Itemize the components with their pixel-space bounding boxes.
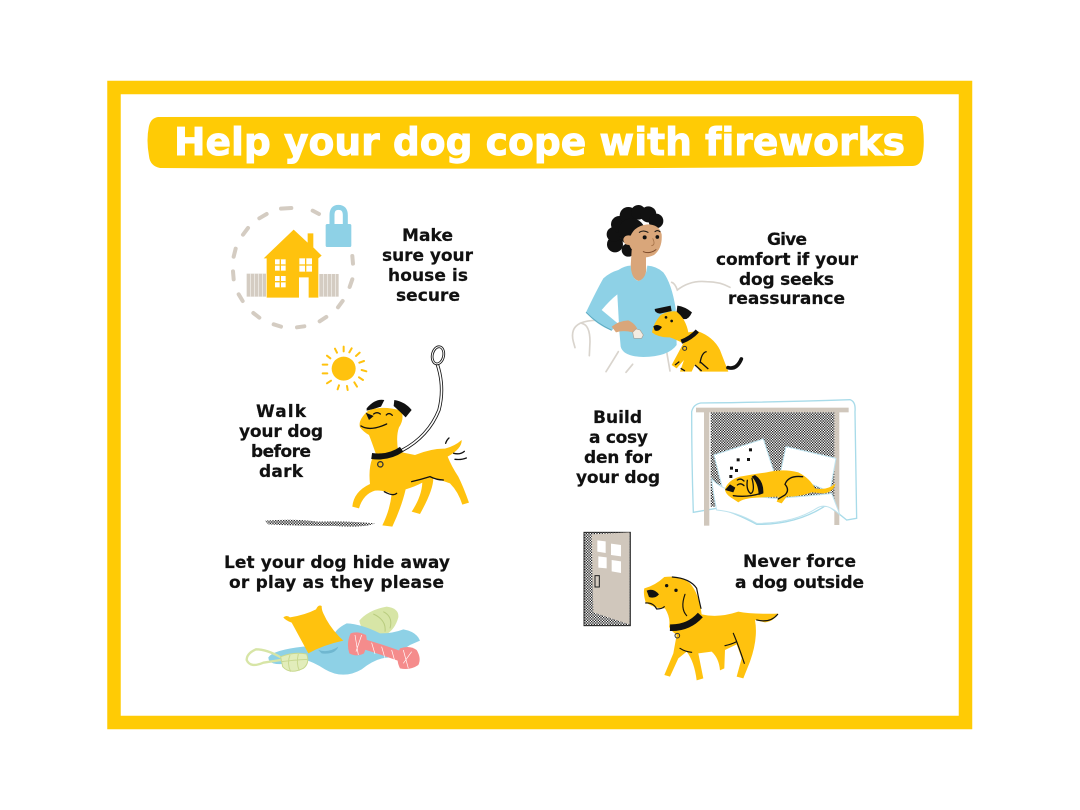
dashed circle bbox=[233, 208, 353, 327]
ground shadow bbox=[265, 520, 375, 527]
text: never force: a dog outside bbox=[735, 573, 864, 593]
illustration: person comforting dog on sofa bbox=[572, 205, 741, 372]
sweater bbox=[586, 266, 677, 357]
text: walk your dog: dark bbox=[259, 462, 304, 482]
title banner bbox=[148, 116, 924, 169]
text: walk your dog bbox=[239, 402, 323, 482]
text: make sure: secure bbox=[396, 286, 460, 306]
text: make sure bbox=[382, 226, 474, 306]
title: Help your dog cope with fireworks bbox=[174, 120, 905, 164]
green shell toy bbox=[359, 607, 398, 635]
panel: never force outside bbox=[584, 532, 864, 680]
table frame bbox=[696, 408, 849, 526]
house bbox=[264, 230, 322, 298]
text: make sure: sure your bbox=[382, 246, 474, 266]
text: give comfort: dog seeks bbox=[739, 270, 834, 290]
illustration: toys and blanket bbox=[247, 605, 420, 675]
blanket bbox=[712, 478, 840, 523]
text: let your dog hide bbox=[224, 553, 450, 593]
illustration: sun, dog and lead bbox=[265, 346, 469, 527]
text: give comfort: comfort if your bbox=[716, 250, 859, 270]
text: walk your dog: before bbox=[251, 442, 311, 462]
icon: house in dashed circle with padlock bbox=[233, 207, 353, 327]
text: walk your dog: your dog bbox=[239, 422, 323, 442]
green rope toy bbox=[247, 649, 281, 665]
text: build a cosy den bbox=[576, 408, 660, 488]
door bbox=[584, 532, 630, 626]
yellow pillow bbox=[283, 605, 343, 653]
text: let your dog hide: or play as they please bbox=[229, 573, 444, 593]
text: build a cosy den: den for bbox=[584, 448, 653, 468]
panel: secure house bbox=[233, 207, 474, 327]
dark background bbox=[711, 412, 837, 507]
text: make sure: Make bbox=[402, 226, 453, 246]
text: walk your dog: Walk bbox=[256, 402, 307, 422]
dog bbox=[725, 470, 836, 503]
head bbox=[623, 224, 662, 257]
illustration: dog sleeping in den bbox=[692, 400, 857, 526]
padlock bbox=[332, 207, 345, 226]
text: never force: Never force bbox=[743, 552, 856, 572]
pink rope toy bbox=[348, 632, 420, 669]
text: build a cosy den: Build bbox=[593, 408, 642, 428]
fence bbox=[247, 274, 339, 297]
dog bbox=[652, 311, 728, 372]
blue blanket bbox=[268, 623, 420, 675]
sofa outline bbox=[572, 281, 730, 372]
panel: hide away or play bbox=[224, 553, 450, 675]
text: build a cosy den: your dog bbox=[576, 468, 660, 488]
dog bbox=[352, 408, 469, 527]
pillows bbox=[714, 439, 774, 492]
illustration: door and dog bbox=[584, 532, 778, 680]
panel: give comfort bbox=[572, 205, 859, 372]
text: make sure: house is bbox=[388, 266, 468, 286]
hair bbox=[607, 205, 663, 257]
text: let your dog hide: Let your dog hide away bbox=[224, 553, 450, 573]
text: give comfort bbox=[716, 230, 859, 309]
text: give comfort: Give bbox=[767, 230, 807, 250]
lead bbox=[402, 346, 445, 451]
yellow page frame bbox=[114, 88, 966, 722]
neck bbox=[631, 250, 646, 281]
sun bbox=[323, 347, 366, 390]
panel: cosy den bbox=[576, 400, 857, 526]
sleeping z's bbox=[729, 448, 752, 478]
panel: walk before dark bbox=[239, 346, 469, 527]
text: never force bbox=[735, 552, 864, 593]
text: build a cosy den: a cosy bbox=[589, 428, 648, 448]
blanket outline bbox=[692, 400, 857, 524]
hand bbox=[612, 320, 637, 332]
dog bbox=[644, 577, 778, 680]
text: give comfort: reassurance bbox=[728, 289, 845, 309]
